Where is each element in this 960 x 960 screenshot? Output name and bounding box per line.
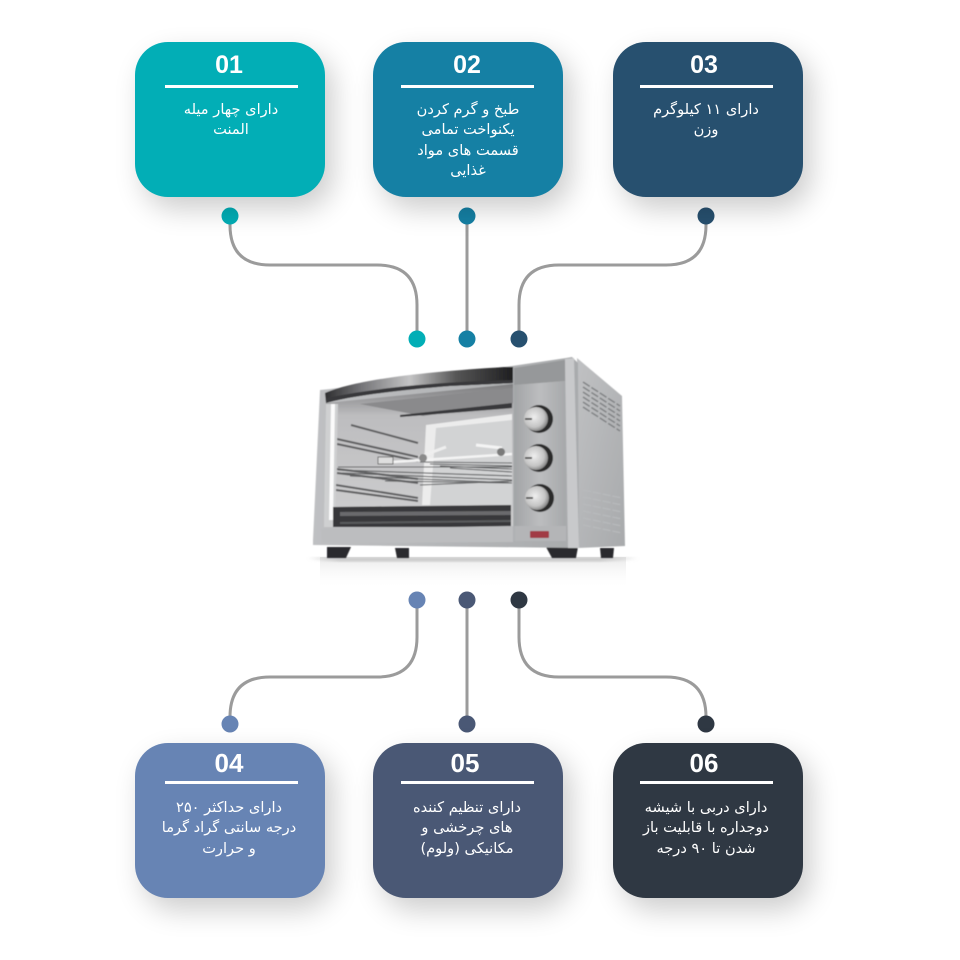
number 03: 03 [690,51,718,79]
right pillar highlight [565,358,579,548]
oven cavity [324,384,513,527]
door frame left highlight [324,404,338,527]
reflection and ground shadow [308,557,638,589]
panel: feature 02 [373,42,563,197]
text: feature 03: دارای ۱۱ کیلوگرم [653,101,759,118]
text: feature 02: قسمت های مواد [417,142,519,159]
text: feature 05: دارای تنظیم کننده [413,799,521,816]
body frame [313,357,579,548]
left wall rails [336,425,418,501]
text: feature 01 [184,101,278,138]
text: feature 06: دوجداره با قابلیت باز [643,819,769,836]
knobs [524,405,554,512]
panel: feature 03 [613,42,803,197]
text: feature 06: شدن تا ۹۰ درجه [656,840,756,857]
text: feature 04: دارای حداکثر ۲۵۰ [176,799,282,816]
text: feature 06 [642,799,769,857]
text: feature 03 [653,100,759,138]
number 05: 05 [451,748,479,778]
bottom tray [333,505,511,527]
panel: feature 01 [135,42,325,197]
text: feature 05: های چرخشی و [421,819,513,836]
control panel [514,360,565,385]
number 04: 04 [215,748,243,778]
side vents [583,382,620,431]
text: feature 02: یکنواخت تمامی [421,121,515,138]
text: feature 04: و حرارت [202,840,256,857]
number 02: 02 [453,51,481,79]
text: feature 02: غذایی [450,162,486,179]
rotisserie spit [378,445,512,464]
text: feature 05: مکانیکی (ولوم) [420,840,514,857]
number 01: 01 [215,51,243,79]
wire rack [338,462,512,485]
text: feature 02 [417,100,519,179]
door bottom bar [321,526,513,543]
text: feature 03: وزن [694,121,718,138]
side panel [577,358,625,548]
panel: feature 04 [135,743,325,898]
number 06: 06 [690,748,718,778]
text: feature 04: درجه سانتی گراد گرما [162,819,296,836]
door handle [325,367,513,403]
text: feature 04 [162,799,296,857]
text: feature 01: المنت [213,121,249,138]
text: feature 02: طبخ و گرم کردن [417,101,519,118]
text: feature 05 [413,799,521,857]
text: feature 01: دارای چهار میله [184,101,278,118]
cavity back wall [424,418,512,505]
cavity ceiling [360,388,513,416]
text: feature 06: دارای دربی با شیشه [645,799,767,816]
panel: feature 06 [613,743,803,898]
red badge [530,531,549,538]
panel: feature 05 [373,743,563,898]
feet [327,547,614,558]
